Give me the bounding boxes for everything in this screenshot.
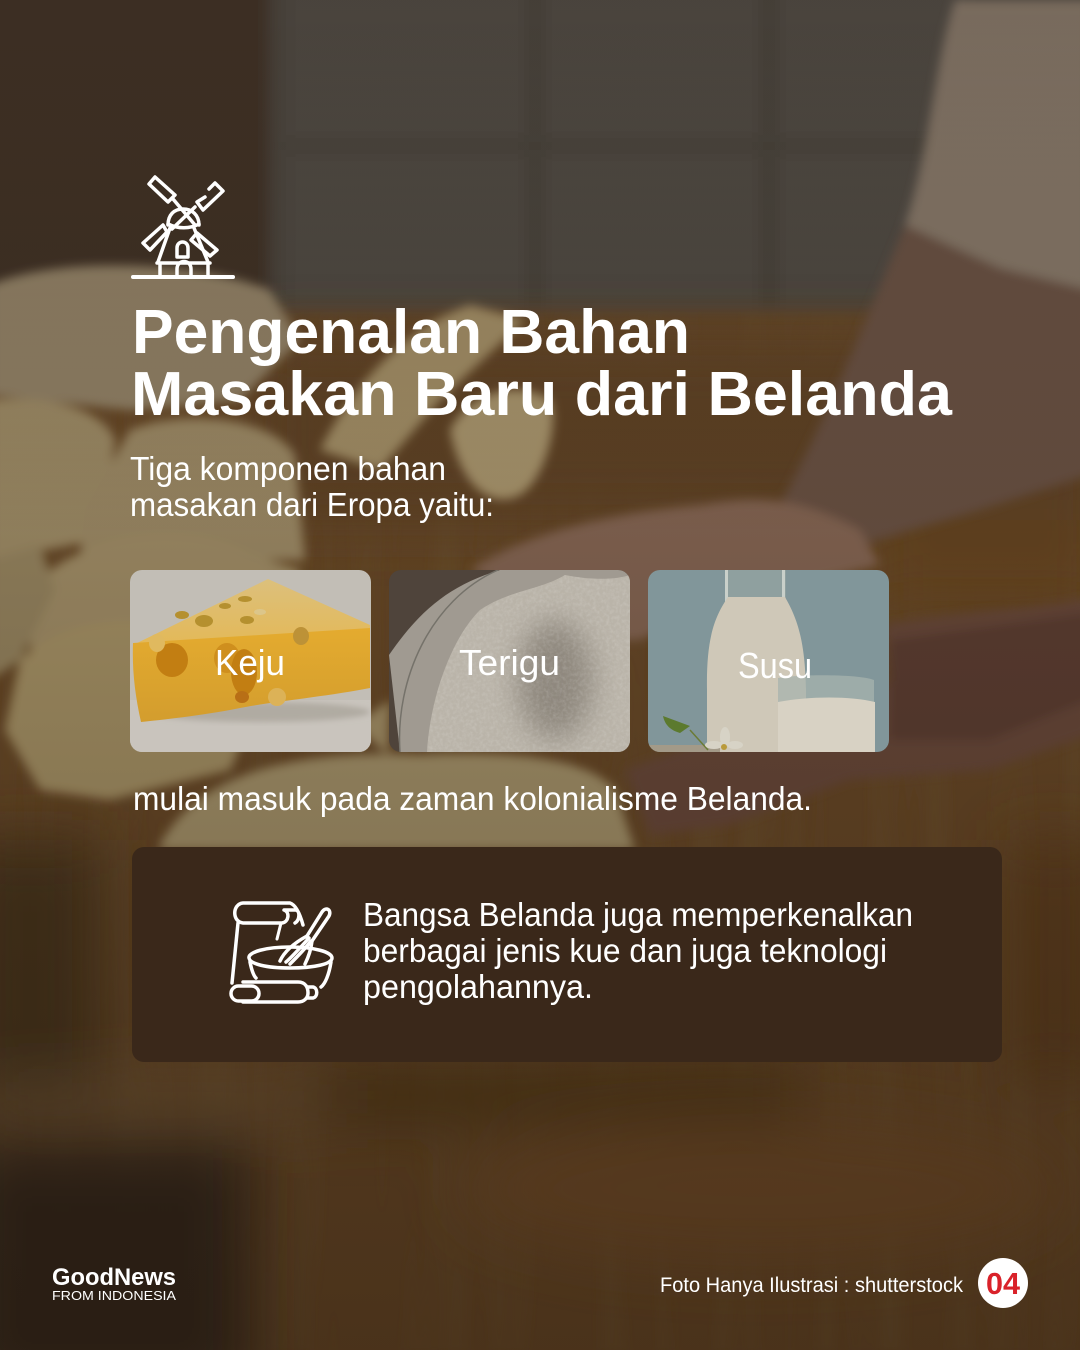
- intro text: [130, 450, 494, 523]
- panel: callout: [132, 847, 1002, 1062]
- logo: GoodNews from Indonesia: [52, 1264, 176, 1303]
- panel: keju card: [130, 570, 371, 752]
- callout text: [363, 896, 913, 1005]
- intro text: Tiga komponen bahan: [130, 450, 446, 487]
- page number badge: 04: [986, 1266, 1021, 1301]
- label: keju: Keju: [215, 642, 285, 683]
- sleeve and arm: [470, 0, 1080, 835]
- dough: [0, 266, 635, 850]
- callout text: Bangsa Belanda juga memperkenalkan: [363, 896, 913, 933]
- logo: GoodNews from Indonesia: GoodNews: [52, 1264, 176, 1291]
- intro text: masakan dari Eropa yaitu:: [130, 486, 494, 523]
- panel: susu card: [648, 570, 889, 752]
- page number badge: [978, 1258, 1028, 1308]
- logo: GoodNews from Indonesia: FROM INDONESIA: [52, 1288, 176, 1303]
- photo credit: Foto Hanya Ilustrasi : shutterstock: [660, 1274, 963, 1297]
- label: terigu: Terigu: [459, 642, 560, 683]
- text: colonial sentence: mulai masuk pada zaman kolonialisme Belanda.: [133, 780, 812, 817]
- callout text: berbagai jenis kue dan juga teknologi: [363, 932, 887, 969]
- panel: terigu card: [389, 570, 635, 752]
- label: susu: Susu: [738, 645, 812, 686]
- callout text: pengolahannya.: [363, 968, 593, 1005]
- icon: windmill: [133, 177, 233, 277]
- title: Pengenalan Bahan: [132, 298, 690, 367]
- title: [131, 298, 953, 429]
- title: Masakan Baru dari Belanda: [131, 360, 953, 429]
- icon: baking tools: [231, 903, 332, 1002]
